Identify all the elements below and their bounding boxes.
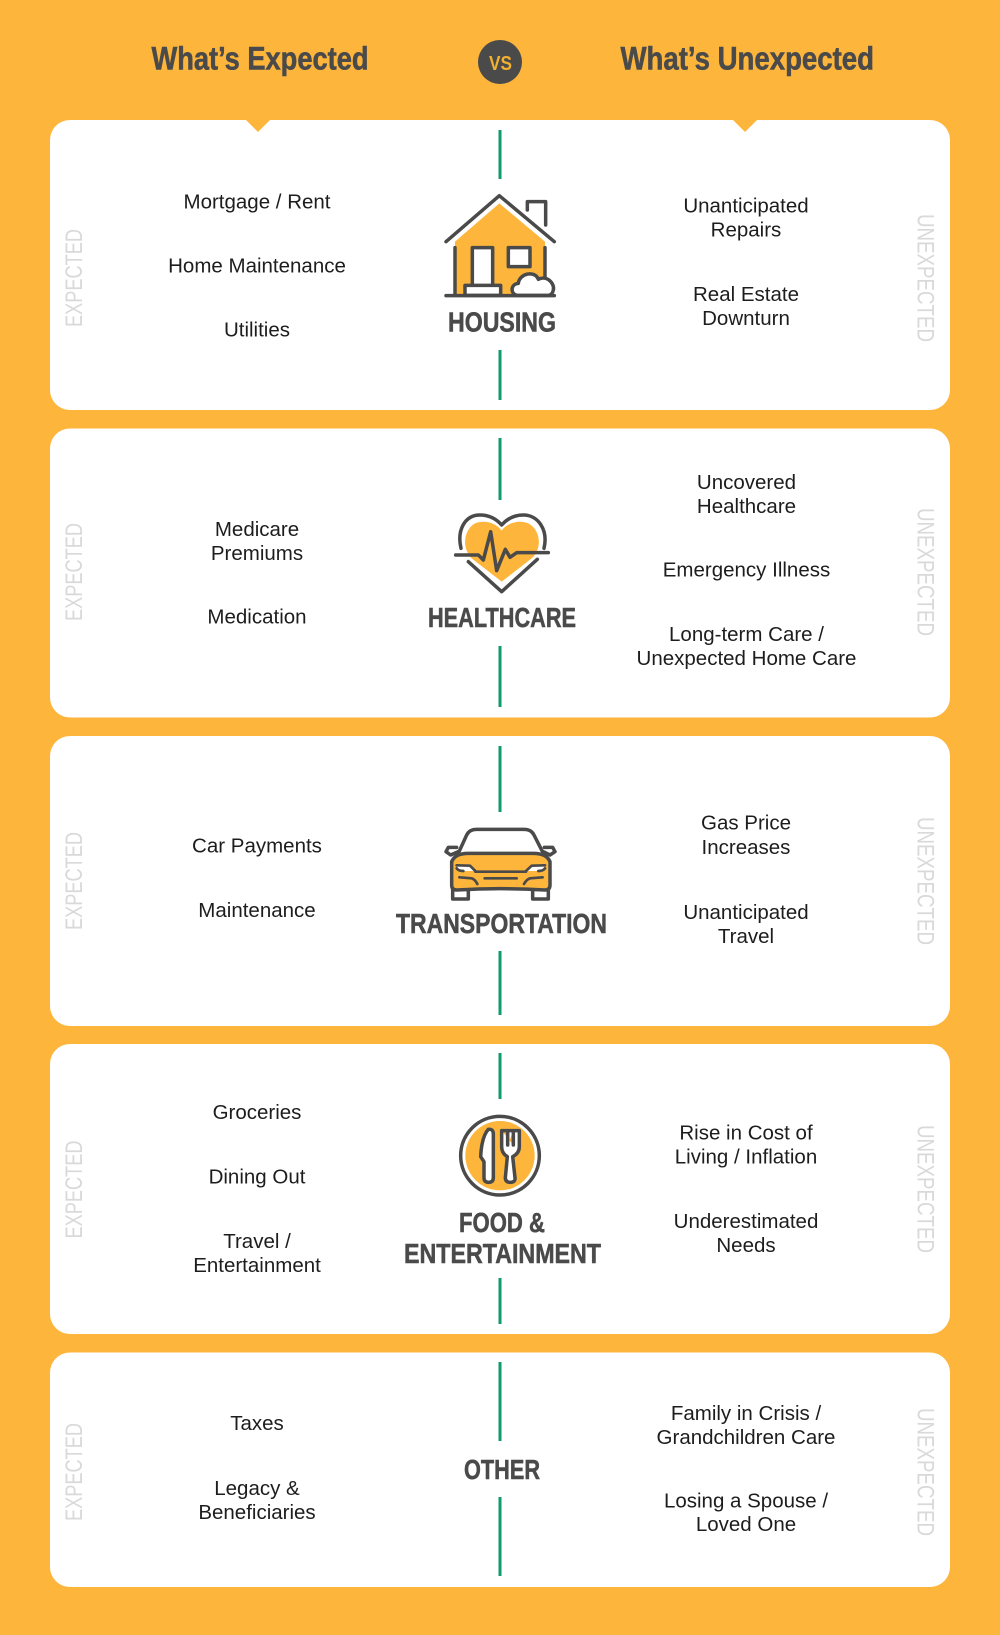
expected list: transportation xyxy=(192,834,322,922)
unexpected list: transportation xyxy=(683,812,809,948)
expected list: healthcare: Medication xyxy=(207,606,307,628)
unexpected list: food and entertainment: Rise in Cost of xyxy=(679,1122,813,1144)
unexpected list: healthcare xyxy=(637,471,856,670)
unexpected list: transportation: Travel xyxy=(718,925,774,948)
unexpected list: housing: Downturn xyxy=(702,307,790,330)
side label: unexpected: UNEXPECTED xyxy=(912,214,938,342)
unexpected list: food and entertainment: Needs xyxy=(716,1234,776,1257)
unexpected list: other xyxy=(657,1402,835,1536)
expected list: other: Beneficiaries xyxy=(198,1501,316,1524)
category title: food and entertainment xyxy=(404,1207,601,1269)
unexpected list: housing: Real Estate xyxy=(693,283,799,306)
badge: VS xyxy=(478,40,522,84)
side label: expected: EXPECTED xyxy=(61,1423,88,1521)
expected list: food and entertainment: Groceries xyxy=(213,1101,301,1124)
expected list: healthcare: Medicare xyxy=(215,518,299,541)
expected list: other: Taxes xyxy=(230,1412,284,1435)
side label: unexpected: UNEXPECTED xyxy=(912,1408,938,1536)
unexpected list: transportation: Increases xyxy=(702,836,790,859)
panel: transportation xyxy=(50,736,950,1026)
expected list: healthcare: Premiums xyxy=(211,542,303,565)
icon: knife and fork xyxy=(461,1116,539,1195)
unexpected list: housing xyxy=(683,194,809,330)
side label: expected: EXPECTED xyxy=(61,1140,88,1238)
side label: unexpected: UNEXPECTED xyxy=(912,817,938,945)
unexpected list: healthcare: Emergency Illness xyxy=(663,558,830,582)
icon: heart xyxy=(456,515,548,592)
unexpected list: other: Grandchildren Care xyxy=(657,1426,835,1449)
panel: healthcare xyxy=(50,428,950,718)
icon: car xyxy=(446,829,555,899)
side label: expected: EXPECTED xyxy=(61,832,88,930)
unexpected list: other: Family in Crisis / xyxy=(671,1402,821,1425)
category title: other: OTHER xyxy=(464,1454,540,1485)
category title: housing: HOUSING xyxy=(448,306,556,338)
unexpected list: healthcare: Uncovered xyxy=(697,471,796,494)
heading: What's Unexpected: What’s Unexpected xyxy=(620,40,874,76)
expected list: food and entertainment: Travel / xyxy=(223,1230,291,1253)
heading: What's Expected: What’s Expected xyxy=(152,40,368,76)
expected list: housing: Home Maintenance xyxy=(168,254,346,278)
side label: expected: EXPECTED xyxy=(61,523,88,621)
category title: food and entertainment: FOOD & xyxy=(459,1207,545,1238)
unexpected list: food and entertainment: Living / Inflation xyxy=(675,1146,817,1168)
expected list: other xyxy=(198,1412,316,1524)
expected list: food and entertainment: Entertainment xyxy=(193,1254,321,1277)
unexpected list: food and entertainment xyxy=(674,1122,818,1257)
unexpected list: transportation: Unanticipated xyxy=(683,901,809,924)
expected list: healthcare xyxy=(207,518,307,628)
badge: VS: VS xyxy=(489,53,512,75)
unexpected list: other: Losing a Spouse / xyxy=(664,1490,828,1512)
category title: healthcare: HEALTHCARE xyxy=(428,602,576,633)
expected list: food and entertainment xyxy=(193,1101,321,1277)
unexpected list: food and entertainment: Underestimated xyxy=(674,1210,818,1233)
expected list: transportation: Car Payments xyxy=(192,834,322,858)
icon: house xyxy=(446,196,554,296)
expected list: housing: Utilities xyxy=(224,318,290,342)
expected list: housing: Mortgage / Rent xyxy=(184,190,331,214)
category title: food and entertainment: ENTERTAINMENT xyxy=(404,1238,601,1269)
unexpected list: healthcare: Unexpected Home Care xyxy=(637,647,856,670)
unexpected list: housing: Unanticipated xyxy=(683,194,809,218)
unexpected list: transportation: Gas Price xyxy=(701,812,791,834)
panel: housing xyxy=(50,120,950,410)
unexpected list: healthcare: Healthcare xyxy=(697,495,796,518)
side label: expected: EXPECTED xyxy=(61,229,88,327)
side label: unexpected: UNEXPECTED xyxy=(912,1125,938,1253)
unexpected list: other: Loved One xyxy=(696,1513,796,1536)
expected list: transportation: Maintenance xyxy=(198,899,316,922)
side label: unexpected: UNEXPECTED xyxy=(912,508,938,636)
unexpected list: housing: Repairs xyxy=(711,218,781,242)
panel: food and entertainment xyxy=(50,1044,950,1334)
panel: other xyxy=(50,1352,950,1587)
unexpected list: healthcare: Long-term Care / xyxy=(669,623,824,646)
expected list: housing xyxy=(168,190,346,342)
category title: transportation: TRANSPORTATION xyxy=(396,908,607,939)
expected list: food and entertainment: Dining Out xyxy=(209,1166,306,1188)
expected list: other: Legacy & xyxy=(214,1477,300,1500)
